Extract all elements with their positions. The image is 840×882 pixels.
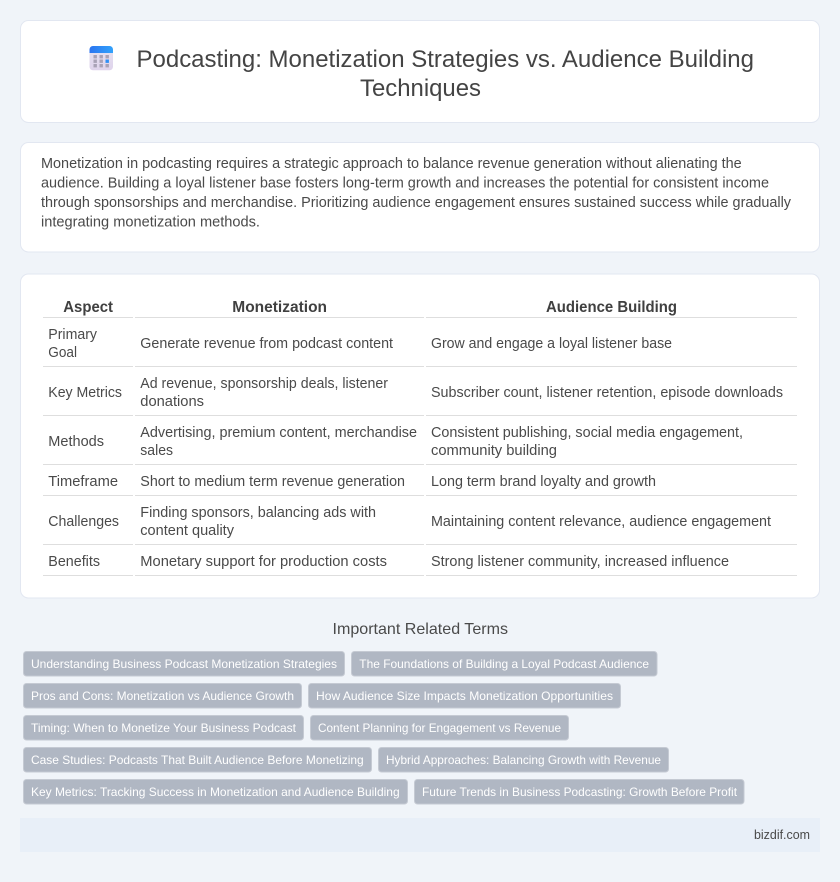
tag: Content Planning for Engagement vs Revenue [318,721,561,735]
icon: calendar [90,46,113,70]
tag [378,748,668,772]
tag [308,684,620,708]
tag [24,780,408,804]
tag: Future Trends in Business Podcasting: Growth Before Profit [422,785,738,799]
text block: introduction [41,156,792,230]
table row: key metrics: donations [140,394,204,410]
tag [24,716,304,740]
table header [63,299,677,316]
tag: Understanding Business Podcast Monetization Strategies [31,657,337,671]
panel: comparison table [20,274,820,598]
text block: introduction: through sponsorships and merchandise. Prioritizing audience engagement ensures sustained success while gradually [41,195,792,211]
table row: primary goal: Goal [48,345,77,361]
panel: header [20,20,820,122]
tag: Key Metrics: Tracking Success in Monetization and Audience Building [31,785,400,799]
footer [20,818,820,852]
text block: introduction: audience. Building a loyal listener base fosters long-term growth and increases the potential for consistent income [41,176,769,192]
table row: benefits: Strong listener community, increased influence [431,554,729,570]
tag: How Audience Size Impacts Monetization Opportunities [316,689,613,703]
table row: key metrics: Subscriber count, listener retention, episode downloads [431,385,783,401]
table row: methods: community building [431,443,557,459]
table row: timeframe: Long term brand loyalty and growth [431,474,656,490]
table row: methods: Consistent publishing, social media engagement, [431,425,743,441]
table row: primary goal: Primary [48,327,98,343]
tag [310,716,568,740]
title [136,46,754,102]
table row: methods: Methods [48,434,104,450]
table row: primary goal: Grow and engage a loyal listener base [431,336,672,352]
table row: timeframe: Timeframe [48,474,118,490]
tag [352,652,657,676]
heading: important related terms: Important Related Terms [332,621,508,638]
tag [414,780,744,804]
table row: key metrics [48,376,783,410]
table row: timeframe [48,474,656,490]
tag: Timing: When to Monetize Your Business Podcast [31,721,297,735]
table row: challenges: Challenges [48,514,119,530]
tag: Pros and Cons: Monetization vs Audience Growth [31,689,294,703]
title: Techniques [360,75,481,102]
table row: key metrics: Key Metrics [48,385,122,401]
table row: timeframe: Short to medium term revenue generation [140,474,405,490]
table row: challenges [48,505,771,539]
table row: benefits: Monetary support for production costs [140,554,387,570]
table row: key metrics: Ad revenue, sponsorship deals, listener [140,376,388,392]
table row: challenges: Maintaining content relevance, audience engagement [431,514,771,530]
table row: challenges: Finding sponsors, balancing ads with [140,505,376,521]
table row: challenges: content quality [140,523,235,539]
tag: Case Studies: Podcasts That Built Audience Before Monetizing [31,753,364,767]
table row: methods [48,425,743,459]
table row: benefits: Benefits [48,554,100,570]
tag: The Foundations of Building a Loyal Podcast Audience [359,657,649,671]
tag list: related terms [24,652,744,804]
text block: introduction: integrating monetization methods. [41,214,260,230]
table row: methods: Advertising, premium content, merchandise [140,425,417,441]
table row: methods: sales [140,443,173,459]
table header: Monetization [232,299,327,316]
footer: bizdif.com [754,827,810,842]
table header: Audience Building [546,299,677,316]
tag [24,684,302,708]
table header: Aspect [63,299,114,316]
tag [24,748,372,772]
text block: introduction: Monetization in podcasting requires a strategic approach to balance revenue generation without alienating the [41,156,742,172]
table row: benefits [48,554,729,570]
table row: primary goal [48,327,672,361]
table row: primary goal: Generate revenue from podcast content [140,336,393,352]
title: Podcasting: Monetization Strategies vs. Audience Building [136,46,754,73]
tag [24,652,344,676]
panel: introduction [20,142,820,252]
tag: Hybrid Approaches: Balancing Growth with Revenue [386,753,661,767]
